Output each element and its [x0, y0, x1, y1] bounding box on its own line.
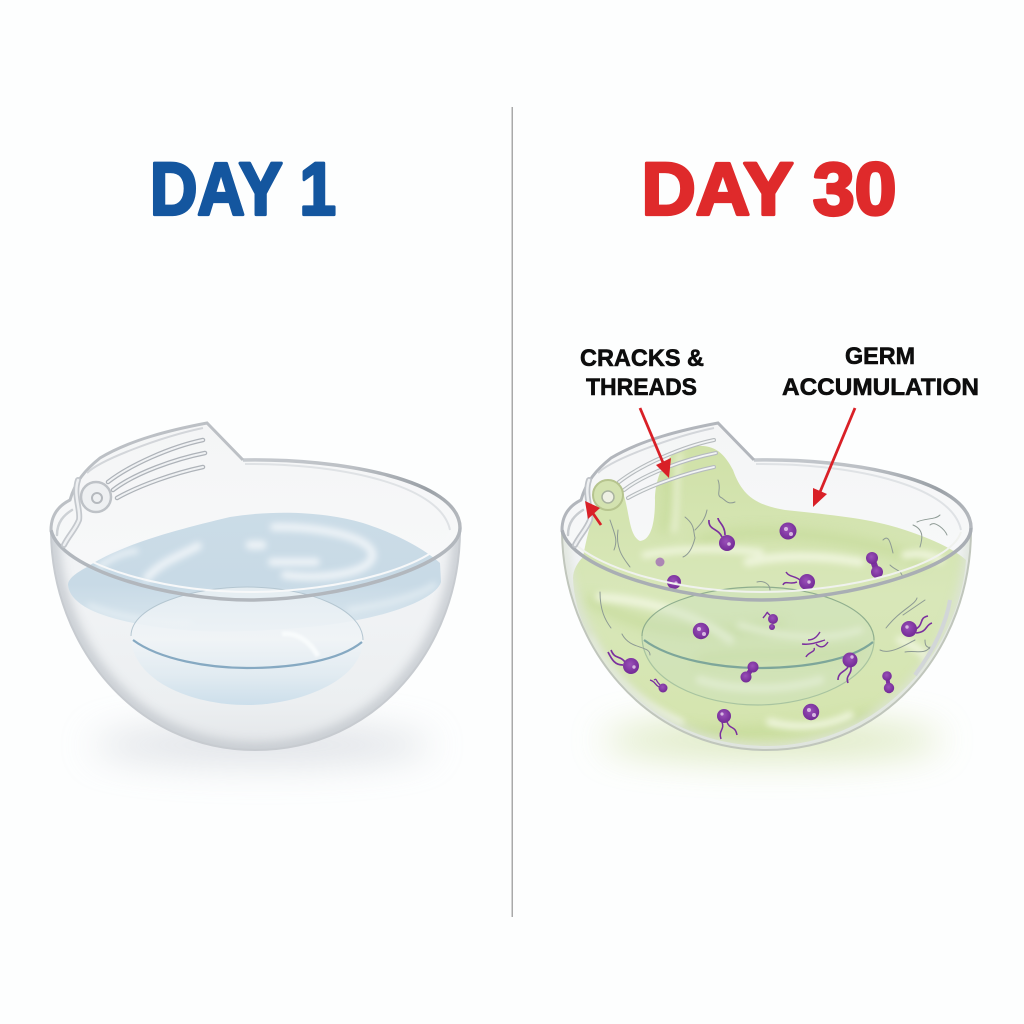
glass edge shading: [51, 530, 460, 750]
green bowl shadow: [602, 720, 942, 760]
title: DAY 1: DAY 1: [150, 147, 336, 230]
germ: [780, 522, 796, 540]
cracks and threads: [600, 480, 947, 655]
slime-covered coil hinge: [568, 480, 623, 545]
tab grooves: [619, 440, 716, 498]
slime highlights: [590, 455, 940, 726]
germ with tail: [709, 518, 735, 551]
arrow: to hinge crack: [585, 501, 601, 525]
label: germ accumulation: ACCUMULATION: [782, 374, 979, 401]
divider line: [512, 107, 513, 917]
germ pair: [866, 552, 883, 578]
germ with tail: [717, 709, 737, 739]
contact lens in slime: [642, 587, 874, 705]
germ pair: [740, 662, 758, 682]
bowl shadow: [92, 725, 432, 765]
label: cracks and threads: [580, 345, 704, 401]
water body: [68, 513, 441, 632]
germ: [803, 704, 819, 720]
germ with tail: [608, 650, 639, 674]
bowl glass body: [562, 530, 971, 750]
faded germ: [656, 558, 664, 566]
bowl outline and rim: [562, 423, 971, 750]
bowl glass body: [51, 530, 460, 750]
label: cracks and threads: CRACKS &: [580, 345, 704, 372]
germ with tail: [763, 612, 778, 630]
bowl outline and rim: [51, 423, 460, 750]
germ with tail: [650, 679, 668, 692]
contact lens: [131, 587, 363, 705]
label: germ accumulation: [782, 343, 979, 401]
germ with tail: [783, 572, 815, 590]
tab grooves: [108, 440, 205, 498]
arrow: to germ accumulation: [813, 408, 855, 507]
bowl back wall and tab: [51, 423, 460, 600]
slime shading and highlights: [590, 455, 940, 733]
panel: day 30 contaminated case: [562, 408, 971, 760]
slime shading: [590, 470, 920, 733]
germs: [608, 518, 932, 739]
title: DAY 30: DAY 30: [642, 147, 896, 230]
arrow: to cracks and threads: [640, 408, 671, 478]
panel: day 1 clean case: [51, 423, 460, 765]
bowl back wall and tab: [562, 423, 971, 600]
label: germ accumulation: GERM: [845, 343, 915, 370]
germ with tail: [838, 652, 858, 683]
glass edge shading: [562, 530, 971, 750]
germ pair: [882, 671, 894, 693]
squiggle germ tails: [802, 632, 828, 657]
germ with tail: [901, 616, 932, 637]
germ: [667, 575, 681, 589]
water highlights: [90, 527, 434, 622]
label: cracks and threads: THREADS: [586, 374, 697, 401]
germ: [693, 623, 709, 639]
green slime body: [573, 446, 966, 746]
coil hinge: [57, 480, 111, 545]
